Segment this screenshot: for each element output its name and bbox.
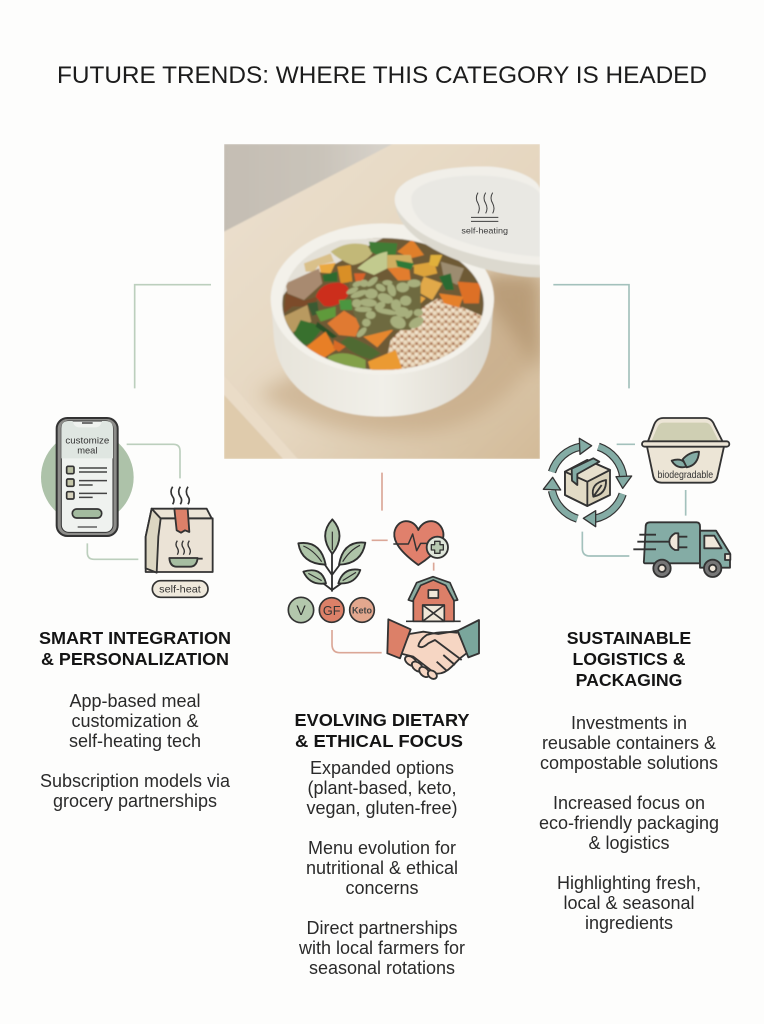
heading: smart integration <box>39 628 231 669</box>
heading: sustainable logistics: LOGISTICS & <box>572 649 686 669</box>
connectors <box>87 444 180 559</box>
text: sustainable logistics details: local & seasonal <box>563 893 695 913</box>
text: sustainable logistics details: compostable solutions <box>540 753 718 773</box>
text: sustainable logistics details: Investments in <box>571 713 687 733</box>
text: dietary and ethical details: Expanded options <box>310 758 454 778</box>
text: dietary and ethical details: vegan, gluten-free) <box>306 798 458 818</box>
icon: phone: meal <box>77 445 97 455</box>
text: sustainable logistics details <box>539 713 719 933</box>
heading: dietary and ethical <box>294 710 470 751</box>
icon: cardboard box <box>565 458 610 506</box>
icon: biodegradable container: biodegradable <box>657 470 714 481</box>
photo: food bowl with self-heating lid <box>224 144 540 459</box>
icon: steam above bag <box>171 487 189 504</box>
background circle <box>41 431 134 524</box>
icon: barn <box>406 577 461 621</box>
text: dietary and ethical details: Direct partnerships <box>306 918 458 938</box>
heading: smart integration: SMART INTEGRATION <box>39 628 231 648</box>
heading: dietary and ethical: & ETHICAL FOCUS <box>295 731 463 751</box>
text: dietary and ethical details: Menu evolution for <box>308 838 456 858</box>
text: smart integration details <box>40 691 231 811</box>
text: sustainable logistics details: Highlighting fresh, <box>557 873 701 893</box>
icon: recycling arrows <box>543 438 632 527</box>
icon: heart with pulse <box>393 521 448 565</box>
heading: sustainable logistics <box>567 628 691 690</box>
text: dietary and ethical details: nutritional & ethical <box>306 858 458 878</box>
icon: diet badges: Keto <box>352 605 372 615</box>
icon: electric truck <box>633 522 730 577</box>
icon: phone <box>57 418 118 536</box>
lid icon: steam <box>471 193 498 221</box>
icon: self-heat bag <box>146 509 213 573</box>
title: FUTURE TRENDS: WHERE THIS CATEGORY IS HEADED <box>57 62 707 89</box>
text: sustainable logistics details: eco-friendly packaging <box>539 813 719 833</box>
text: sustainable logistics details: Increased focus on <box>553 793 705 813</box>
text: sustainable logistics details: ingredients <box>585 913 673 933</box>
icon: diet badges: V <box>296 602 306 618</box>
text: sustainable logistics details: reusable containers & <box>542 733 716 753</box>
text: dietary and ethical details: with local farmers for <box>298 938 465 958</box>
text: smart integration details: customization & <box>71 711 199 731</box>
panel: sustainable logistics icons <box>543 285 730 577</box>
icon: plant <box>298 519 365 592</box>
text: sustainable logistics details: & logistics <box>588 833 670 853</box>
text: smart integration details: self-heating tech <box>69 731 201 751</box>
text: dietary and ethical details: concerns <box>345 878 419 898</box>
panel: dietary and ethical icons <box>288 473 479 681</box>
text: dietary and ethical details <box>298 758 465 978</box>
label: self-heat <box>152 581 208 597</box>
text: smart integration details: Subscription models via <box>40 771 231 791</box>
connectors <box>553 285 686 556</box>
text: dietary and ethical details: seasonal rotations <box>309 958 455 978</box>
text: smart integration details: grocery partnerships <box>53 791 217 811</box>
panel: smart integration icons <box>41 285 213 597</box>
text: smart integration details: App-based meal <box>69 691 201 711</box>
icon: phone: customize <box>65 436 109 446</box>
heading: sustainable logistics: SUSTAINABLE <box>567 628 691 648</box>
icon: diet badges <box>288 597 374 623</box>
icon: handshake <box>387 619 479 681</box>
icon: biodegradable container <box>642 418 729 483</box>
icon: diet badges: GF <box>323 604 341 618</box>
lid label: self-heating <box>461 225 508 235</box>
label: self-heat: self-heat <box>159 584 201 595</box>
connectors <box>332 473 434 653</box>
heading: dietary and ethical: EVOLVING DIETARY <box>294 710 470 730</box>
connector to photo <box>135 285 211 388</box>
heading: sustainable logistics: PACKAGING <box>576 670 682 690</box>
heading: smart integration: & PERSONALIZATION <box>41 649 229 669</box>
text: dietary and ethical details: (plant-based, keto, <box>307 778 457 798</box>
